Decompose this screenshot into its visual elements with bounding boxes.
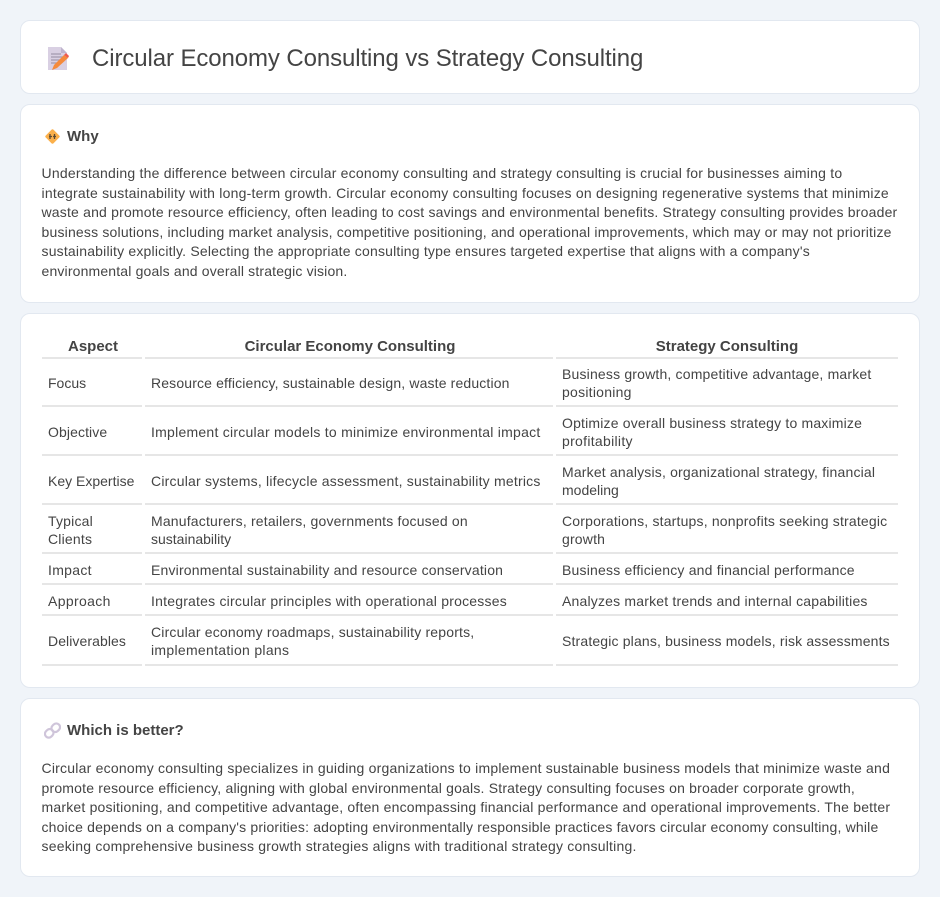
panel: title card — [20, 20, 920, 94]
text: why paragraph — [42, 165, 897, 279]
text: why paragraph: sustainability explicitly. Selecting the appropriate consulting type ensures targeted expertise that aligns with a company's — [42, 243, 810, 259]
text: which is better paragraph: Circular economy consulting specializes in guiding organizations to implement sustainable business models that minimize waste and — [42, 760, 890, 776]
typical clients: strategy — [562, 513, 887, 547]
focus: strategy: positioning — [562, 384, 632, 400]
row: typical clients: Typical — [48, 513, 93, 529]
row: focus: Focus — [48, 375, 86, 391]
deliverables: circular: Circular economy roadmaps, sustainability reports, — [151, 624, 474, 640]
focus: strategy: Business growth, competitive advantage, market — [562, 366, 871, 382]
title: Circular Economy Consulting vs Strategy Consulting — [92, 45, 643, 72]
text: which is better paragraph: choice depends on a company's priorities: adopting environmentally responsible practices favors circular economy consulting, while — [42, 819, 878, 835]
key expertise: strategy: Market analysis, organizational strategy, financial — [562, 464, 875, 480]
text: why paragraph: environmental goals and overall strategic vision. — [42, 263, 347, 279]
text: why paragraph: waste and promote resource efficiency, often leading to cost savings and environmental benefits. Strategy consulting provides broader — [42, 204, 897, 220]
key expertise: circular: Circular systems, lifecycle assessment, sustainability metrics — [151, 473, 541, 489]
text: which is better paragraph: seeking comprehensive business growth strategies aligns with traditional strategy consulting. — [42, 838, 637, 854]
panel: why — [20, 104, 920, 303]
typical clients: strategy: growth — [562, 531, 605, 547]
text: why paragraph: Understanding the difference between circular economy consulting and strategy consulting is crucial for businesses aiming to — [42, 165, 842, 181]
row: impact: Impact — [48, 562, 92, 578]
focus: circular: Resource efficiency, sustainable design, waste reduction — [151, 375, 510, 391]
heading: why: Why — [67, 128, 99, 145]
objective: strategy — [562, 415, 862, 449]
row: key expertise: Key Expertise — [48, 473, 134, 489]
focus: strategy — [562, 366, 872, 400]
panel: which is better — [20, 698, 920, 877]
typical clients: circular — [151, 513, 468, 547]
impact: circular: Environmental sustainability and resource conservation — [151, 562, 503, 578]
table heading: circular economy consulting: Circular Economy Consulting — [245, 338, 455, 355]
key expertise: strategy: modeling — [562, 482, 619, 498]
row: typical clients: Clients — [48, 531, 92, 547]
key expertise: strategy — [562, 464, 875, 498]
heading: which is better: Which is better? — [67, 722, 184, 739]
icon: document with pencil — [48, 47, 69, 70]
row: approach: Approach — [48, 593, 111, 609]
objective: strategy: Optimize overall business strategy to maximize — [562, 415, 862, 431]
typical clients: circular: Manufacturers, retailers, governments focused on — [151, 513, 468, 529]
objective: strategy: profitability — [562, 433, 633, 449]
icon: chain link — [44, 722, 61, 739]
panel: comparison table — [20, 313, 920, 688]
table heading: strategy consulting: Strategy Consulting — [656, 338, 798, 355]
text: why paragraph: integrate sustainability with long-term growth. Circular economy consulting focuses on designing regenerative systems that minimize — [42, 185, 889, 201]
deliverables: circular: implementation plans — [151, 642, 289, 658]
icon: warning diamond — [45, 129, 60, 144]
deliverables: strategy: Strategic plans, business models, risk assessments — [562, 633, 890, 649]
objective: circular: Implement circular models to minimize environmental impact — [151, 424, 541, 440]
approach: strategy: Analyzes market trends and internal capabilities — [562, 593, 868, 609]
text: which is better paragraph — [42, 760, 890, 854]
row: typical clients — [48, 513, 93, 547]
deliverables: circular — [151, 624, 474, 658]
typical clients: strategy: Corporations, startups, nonprofits seeking strategic — [562, 513, 887, 529]
row: deliverables: Deliverables — [48, 633, 126, 649]
approach: circular: Integrates circular principles with operational processes — [151, 593, 507, 609]
typical clients: circular: sustainability — [151, 531, 231, 547]
text: why paragraph: business solutions, including market analysis, competitive positioning, and operational improvements, which may or may not prioritize — [42, 224, 892, 240]
text: which is better paragraph: promote resource efficiency, aligning with global environmental goals. Strategy consulting focuses on broader corporate growth, — [42, 780, 855, 796]
row: objective: Objective — [48, 424, 107, 440]
table heading: aspect: Aspect — [68, 338, 118, 355]
text: which is better paragraph: market positioning, and competitive advantage, often encompassing financial performance and operational improvements. The better — [42, 799, 890, 815]
impact: strategy: Business efficiency and financial performance — [562, 562, 855, 578]
